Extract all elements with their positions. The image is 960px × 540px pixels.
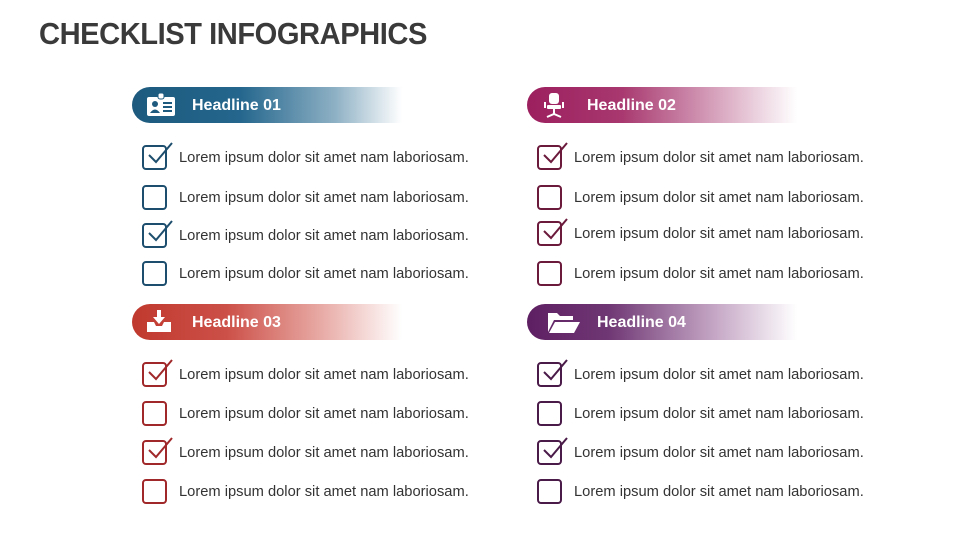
panel: headline 02 [527, 87, 864, 286]
header pill 02: Headline 02 [587, 97, 676, 114]
checklist 01 [142, 142, 469, 286]
checklist 04: Lorem ipsum dolor sit amet nam laboriosam. [574, 484, 864, 500]
panel: headline 04 [527, 304, 864, 504]
checklist 03 [142, 359, 469, 504]
header pill 03: Headline 03 [192, 314, 281, 331]
panel: headline 01 [132, 87, 469, 286]
checklist 04 [537, 359, 864, 504]
header pill 01 [132, 87, 402, 123]
title: CHECKLIST INFOGRAPHICS [39, 16, 427, 51]
checklist 01: Lorem ipsum dolor sit amet nam laboriosam. [179, 228, 469, 244]
checklist 04: Lorem ipsum dolor sit amet nam laboriosam. [574, 367, 864, 383]
header pill 04 [527, 304, 797, 340]
header pill 01: Headline 01 [192, 97, 281, 114]
checklist 03: Lorem ipsum dolor sit amet nam laboriosam. [179, 367, 469, 383]
header pill 04: Headline 04 [597, 314, 686, 331]
checklist 01: Lorem ipsum dolor sit amet nam laboriosam. [179, 190, 469, 206]
checklist 02: Lorem ipsum dolor sit amet nam laboriosam. [574, 150, 864, 166]
checklist 03: Lorem ipsum dolor sit amet nam laboriosam. [179, 406, 469, 422]
checklist 03: Lorem ipsum dolor sit amet nam laboriosam. [179, 484, 469, 500]
checklist 02: Lorem ipsum dolor sit amet nam laboriosam. [574, 266, 864, 282]
checklist 02: Lorem ipsum dolor sit amet nam laboriosam. [574, 226, 864, 242]
checklist 01: Lorem ipsum dolor sit amet nam laboriosam. [179, 150, 469, 166]
checklist 02 [537, 142, 864, 286]
checklist 03: Lorem ipsum dolor sit amet nam laboriosam. [179, 445, 469, 461]
checklist 02: Lorem ipsum dolor sit amet nam laboriosam. [574, 190, 864, 206]
header pill 02 [527, 87, 797, 123]
checklist 04: Lorem ipsum dolor sit amet nam laboriosam. [574, 445, 864, 461]
checklist 01: Lorem ipsum dolor sit amet nam laboriosam. [179, 266, 469, 282]
header pill 03 [132, 304, 402, 340]
checklist 04: Lorem ipsum dolor sit amet nam laboriosam. [574, 406, 864, 422]
panel: headline 03 [132, 304, 469, 504]
